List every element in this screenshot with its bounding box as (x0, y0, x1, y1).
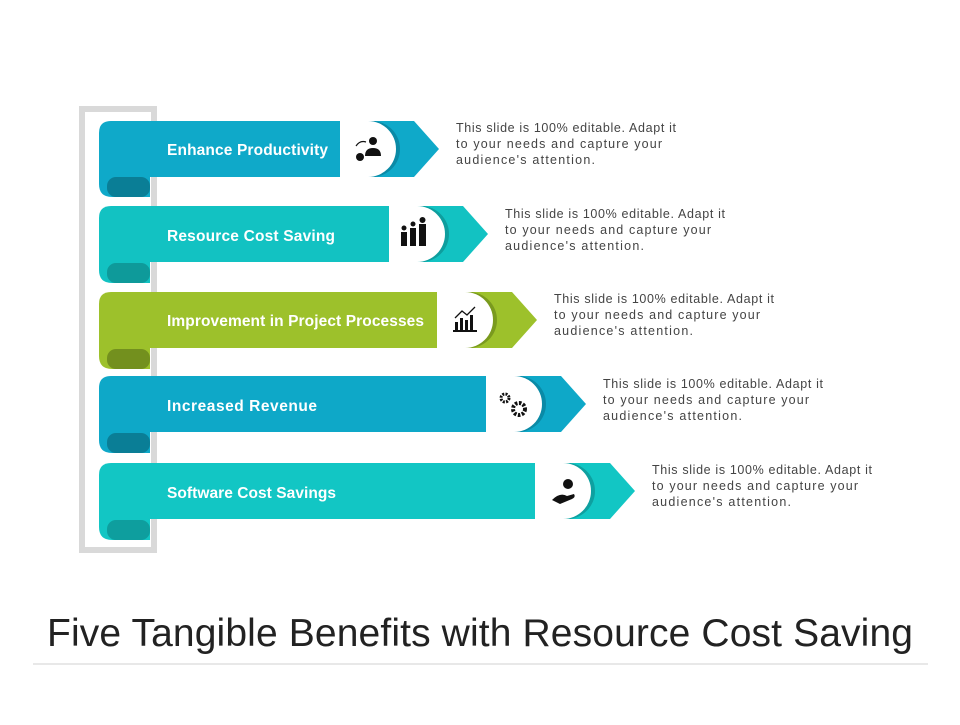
row 2: Resource Cost Saving: to your needs and capture your (505, 223, 711, 237)
row 5: Software Cost Savings: audience's attention. (652, 495, 791, 509)
row 4: Increased Revenue: to your needs and capture your (603, 393, 809, 407)
row 4: Increased Revenue (99, 376, 824, 453)
row 3: Improvement in Project Processes: to your needs and capture your (554, 308, 760, 322)
icon: growth chart (453, 307, 477, 332)
row 5: Software Cost Savings: to your needs and capture your (652, 479, 858, 493)
row 2: Resource Cost Saving: This slide is 100% editable. Adapt it (505, 207, 726, 221)
row 3: Improvement in Project Processes: This slide is 100% editable. Adapt it (554, 292, 775, 306)
row 5: Software Cost Savings: This slide is 100% editable. Adapt it (652, 463, 873, 477)
icon: hand with coin (552, 479, 575, 504)
row 2: Resource Cost Saving (99, 206, 726, 283)
frame: gray bracket (82, 109, 154, 550)
icon: gears (501, 394, 525, 415)
row 5: Software Cost Savings: Software Cost Savings (167, 485, 336, 502)
row 3: Improvement in Project Processes: audience's attention. (554, 324, 693, 338)
row 1: Enhance Productivity: This slide is 100% editable. Adapt it (456, 121, 677, 135)
row 2: Resource Cost Saving: Resource Cost Saving (167, 228, 335, 245)
row 5: Software Cost Savings (99, 463, 873, 540)
row 1: Enhance Productivity: to your needs and capture your (456, 137, 662, 151)
row 4: Increased Revenue: Increased Revenue (167, 398, 317, 415)
row 3: Improvement in Project Processes: Improvement in Project Processes (167, 313, 424, 330)
icon: workers (401, 217, 426, 246)
row 1: Enhance Productivity: audience's attention. (456, 153, 595, 167)
row 4: Increased Revenue: This slide is 100% editable. Adapt it (603, 377, 824, 391)
row 1: Enhance Productivity (99, 121, 677, 197)
row 3: Improvement in Project Processes (99, 292, 775, 369)
row 1: Enhance Productivity: Enhance Productivity (167, 142, 328, 159)
row 2: Resource Cost Saving: audience's attention. (505, 239, 644, 253)
row 4: Increased Revenue: audience's attention. (603, 409, 742, 423)
title: Five Tangible Benefits with Resource Cost Saving (47, 612, 913, 655)
icon: person with gears (356, 137, 381, 161)
